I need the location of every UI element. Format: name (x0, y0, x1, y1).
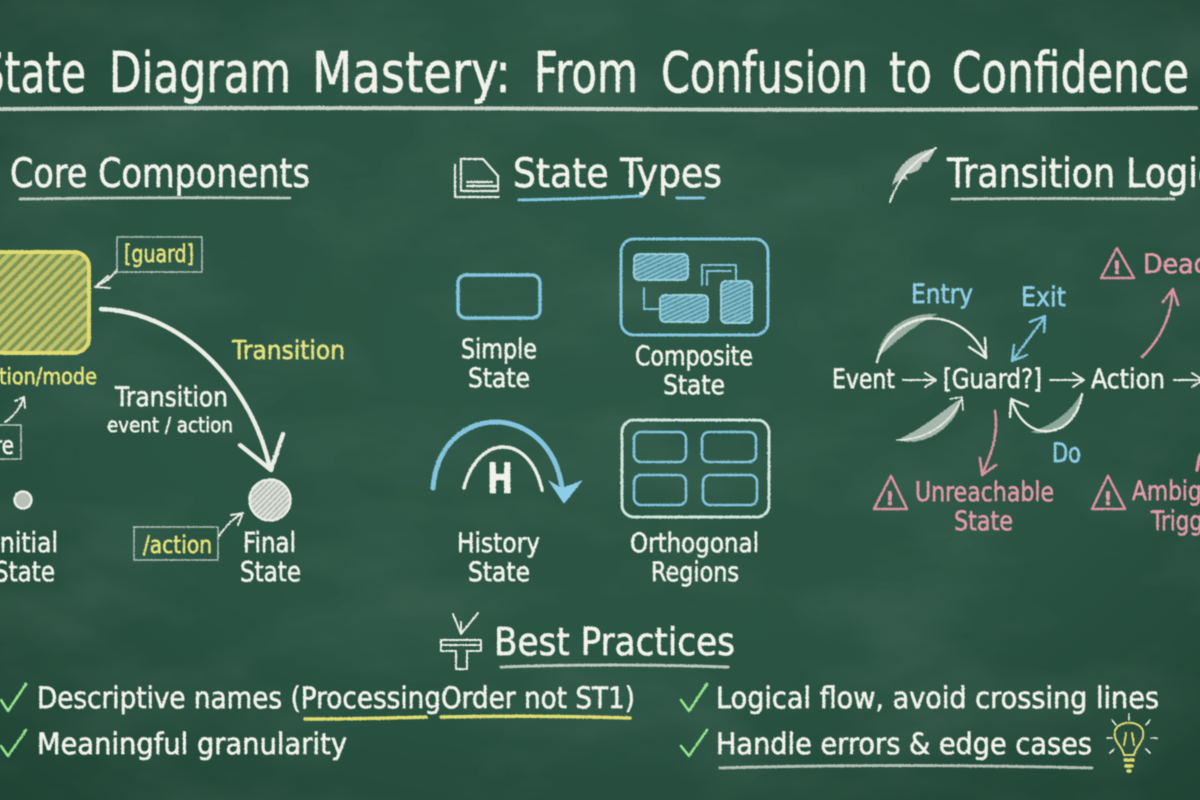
panel: best practices (1, 613, 1159, 771)
heading: best practices: Best Practices (494, 620, 735, 664)
flow: event guard action (832, 364, 1200, 395)
label: state description: tion/mode (0, 365, 97, 390)
label: final state: State (240, 555, 301, 588)
label: transition event and action (107, 382, 233, 437)
icon: light bulb (1107, 714, 1157, 771)
bullet: meaningful granularity: Meaningful granularity (37, 727, 347, 761)
bullet: descriptive names: Descriptive names (ProcessingOrder not ST1) (37, 681, 635, 715)
flow: event guard action: [Guard?] (943, 364, 1042, 395)
icon: pin with arrow (441, 613, 481, 669)
warning: ambiguous trigger (1092, 476, 1200, 537)
diagram: composite state: Composite (635, 341, 753, 372)
title: to (889, 41, 932, 106)
label: final state: Final (243, 526, 296, 559)
label: transition event and action: Transition (114, 382, 228, 413)
diagram: composite state: State (663, 370, 725, 401)
callout: entry box (0, 397, 25, 460)
label: entry: Entry (911, 279, 973, 310)
diagram: history state: H (487, 454, 513, 503)
bullet: logical flow: Logical flow, avoid crossing lines (716, 681, 1159, 715)
title: Diagram (109, 41, 291, 106)
arrow: exit double headed (1012, 316, 1045, 361)
arrow: feather entry (877, 314, 986, 362)
callout: action: /action (143, 531, 212, 559)
arrow: main transition (101, 309, 283, 470)
label: do: Do (1052, 438, 1081, 469)
warning: unreachable state: State (954, 506, 1013, 537)
callout: guard (95, 237, 202, 288)
diagram: history state: State (468, 557, 530, 588)
icon: stacked pages (455, 159, 499, 197)
diagram: orthogonal regions (622, 420, 769, 588)
icon: feather (890, 148, 936, 202)
title: Confusion (661, 41, 868, 106)
diagram: simple state (458, 275, 540, 394)
diagram: simple state: Simple (461, 334, 537, 365)
warning: deadlock: ! (1113, 257, 1121, 279)
warning: unreachable state (874, 476, 1054, 537)
arrow: pink lower right (1197, 455, 1200, 470)
diagram: orthogonal regions: Regions (651, 557, 739, 588)
label: transition yellow: Transition (231, 336, 345, 366)
arrow: feather do loop (1010, 392, 1082, 433)
panel: transition logic (832, 148, 1200, 537)
panel: state types (433, 151, 769, 588)
diagram: history state: History (457, 528, 540, 559)
diagram: orthogonal regions: Orthogonal (630, 528, 759, 559)
warning: unreachable state: ! (886, 488, 894, 510)
label: final state (240, 526, 301, 588)
heading: core components: Core Components (10, 151, 310, 197)
title: From (534, 41, 638, 106)
diagram: simple state: State (468, 363, 530, 394)
state box: hatched yellow rounded rectangle (0, 252, 89, 353)
heading: state types: State Types (513, 151, 722, 197)
panel: core components (0, 151, 345, 588)
callout: action (134, 513, 243, 560)
diagram: history state (433, 422, 583, 588)
label: initial state (0, 526, 58, 588)
arrow: feather lower left (897, 397, 963, 442)
label: transition event and action: event / action (107, 413, 233, 437)
title: Mastery: (312, 41, 511, 106)
icon: final state circle (250, 480, 290, 520)
warning: deadlock (1101, 248, 1200, 280)
warning: unreachable state: Unreachable (915, 477, 1054, 508)
bullet: handle errors: Handle errors & edge cases (716, 727, 1092, 761)
flow: event guard action: Event (832, 364, 895, 395)
flow: event guard action: Action (1091, 364, 1165, 395)
callout: guard: [guard] (124, 240, 194, 268)
warning: ambiguous trigger: ! (1104, 488, 1112, 510)
label: exit: Exit (1021, 282, 1066, 313)
diagram: composite state (621, 239, 768, 401)
arrow: pink down to unreachable (980, 411, 996, 475)
icon: initial state dot (14, 492, 32, 508)
title (0, 41, 1196, 110)
arrow: pink up to deadlock (1142, 289, 1178, 357)
